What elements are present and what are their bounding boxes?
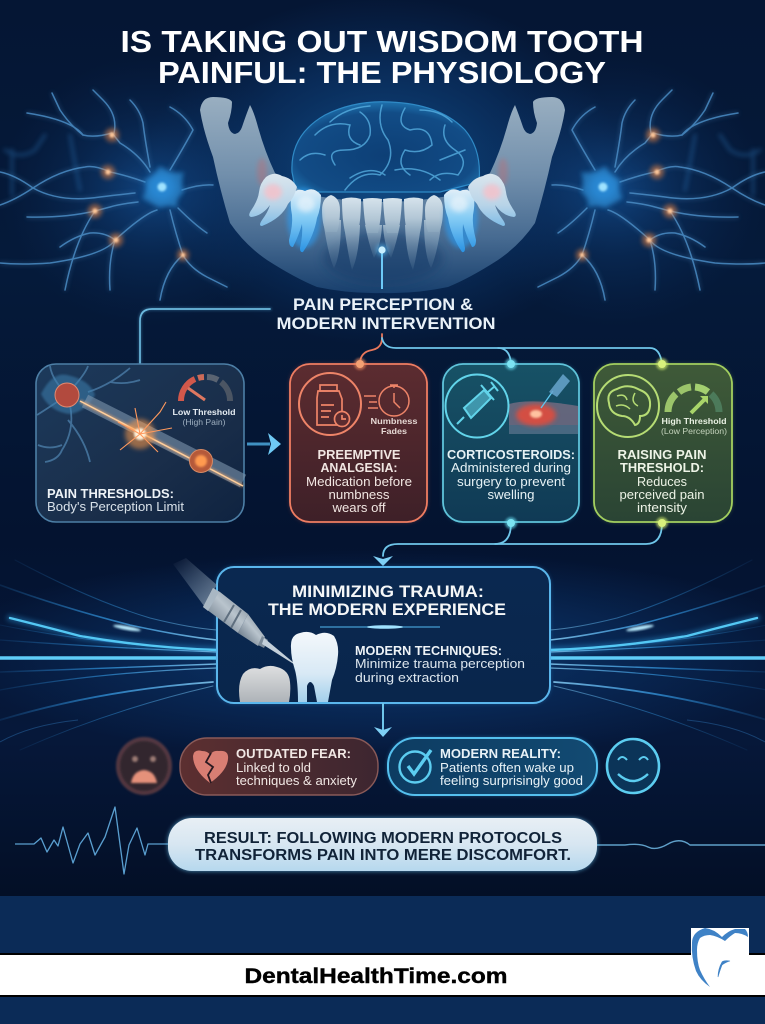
raising pain threshold caption: intensity [637,501,688,515]
panel: pain thresholds [36,364,244,522]
arrow: into minimizing trauma panel [373,556,393,566]
preemptive analgesia caption: numbness [328,488,390,502]
corticosteroids caption [447,448,575,502]
panel: minimizing trauma [173,558,550,703]
low threshold label [172,408,236,427]
modern reality text: Patients often wake up [440,761,574,775]
modern reality text [440,747,583,788]
raising pain threshold caption: RAISING PAIN [618,448,706,462]
title: PAINFUL: THE PHYSIOLOGY [158,55,606,90]
result banner [168,818,597,871]
panel heading: MINIMIZING TRAUMA: [292,582,484,601]
preemptive analgesia caption: ANALGESIA: [320,461,398,475]
outdated fear text: techniques & anxiety [236,774,358,788]
panel: modern reality [388,738,597,795]
corticosteroids caption: Administered during [451,461,571,475]
numbness fades label: Numbness [370,416,418,426]
panel heading: THE MODERN EXPERIENCE [268,600,506,619]
icon: stopwatch [364,385,409,416]
modern techniques text: Minimize trauma perception [355,657,525,671]
panel heading [268,582,506,619]
connector: jaw to heading [376,244,388,289]
pain thresholds caption [47,486,185,514]
icon: worried face [116,737,172,795]
neuron: right [538,90,765,300]
mandible [200,97,565,293]
icon: smiling face [607,739,659,793]
footer website: DentalHealthTime.com [244,965,508,988]
outdated fear text: Linked to old [236,761,311,775]
modern techniques text: during extraction [355,671,459,685]
modern reality text: feeling surprisingly good [440,774,583,788]
numbness fades label [370,416,418,436]
tissue injection image [509,374,578,434]
icon: syringe [446,374,508,438]
heartbeat line: right [597,841,765,848]
high threshold label: High Threshold [662,416,726,426]
panel: outdated fear [180,738,378,795]
heartbeat line: left [15,807,168,874]
preemptive analgesia caption: PREEMPTIVE [318,448,400,462]
preemptive analgesia caption: Medication before [306,475,412,489]
footer band [0,896,765,1024]
panel: raising pain threshold [594,358,732,529]
icon: medicine bottle [299,373,361,435]
raising pain threshold caption [618,448,706,515]
modern techniques text: MODERN TECHNIQUES: [355,644,502,658]
high threshold label: (Low Perception) [661,426,727,436]
raising pain threshold caption: THRESHOLD: [620,461,704,475]
pain thresholds caption: Body's Perception Limit [47,500,185,514]
logo: tooth [691,928,749,987]
raising pain threshold caption: perceived pain [620,488,705,502]
corticosteroids caption: surgery to prevent [457,475,566,489]
gauge: high threshold [668,387,719,413]
light streaks: left [0,560,218,750]
corticosteroids caption: CORTICOSTEROIDS: [447,448,575,462]
arrow: down to comparison [374,703,392,737]
icon: check mark [400,750,431,782]
heading: pain perception: MODERN INTERVENTION [276,314,496,333]
teeth [249,174,516,270]
preemptive analgesia caption [306,448,412,515]
modern reality text: MODERN REALITY: [440,747,561,761]
raising pain threshold caption: Reduces [637,475,687,489]
high threshold label [661,416,727,436]
title [120,24,644,90]
heading: pain perception: PAIN PERCEPTION & [293,295,473,314]
numbness fades label: Fades [381,426,407,436]
brain [292,102,479,192]
icon: small molar [239,666,290,702]
pain thresholds caption: PAIN THRESHOLDS: [47,486,174,501]
neuron: left [0,90,227,300]
heading: pain perception [276,295,496,333]
panel: corticosteroids [443,358,579,529]
icon: dental handpiece [173,558,305,672]
light streaks: right [549,560,765,750]
result banner: TRANSFORMS PAIN INTO MERE DISCOMFORT. [195,847,571,864]
arrow: thresholds to interventions [247,433,281,455]
jaw and brain illustration [200,97,565,293]
outdated fear text [236,747,358,788]
icon: brain [597,375,659,437]
icon: large molar [291,632,338,702]
modern techniques text [355,644,525,685]
corticosteroids caption: swelling [488,488,535,502]
result banner: RESULT: FOLLOWING MODERN PROTOCOLS [204,830,562,847]
low threshold label: Low Threshold [172,408,236,417]
gauge: low threshold [181,377,230,401]
icon: broken heart [193,751,228,783]
preemptive analgesia caption: wears off [331,501,386,515]
outdated fear text: OUTDATED FEAR: [236,747,351,761]
connectors between heading and panels [140,309,662,556]
panel: preemptive analgesia [290,358,427,522]
low threshold label: (High Pain) [182,418,226,427]
title: IS TAKING OUT WISDOM TOOTH [120,24,644,59]
nerve cell illustration [37,366,243,486]
